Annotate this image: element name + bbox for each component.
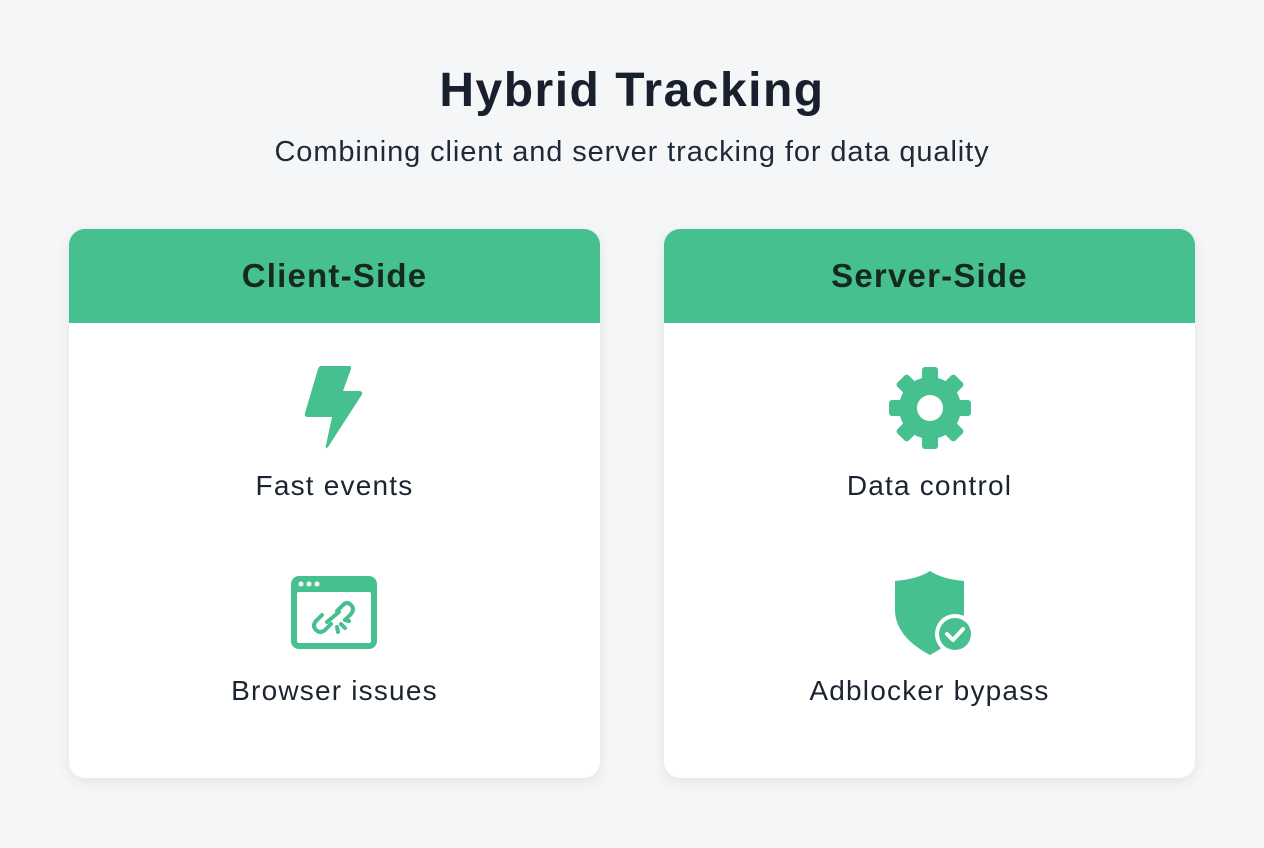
- icon: browser broken link: [291, 576, 377, 649]
- icon: lightning bolt: [304, 366, 362, 448]
- header: client-side: Client-Side: [242, 257, 427, 294]
- panel: client-side: [69, 229, 600, 778]
- icon: shield check: [895, 571, 971, 655]
- label: adblocker bypass: Adblocker bypass: [809, 675, 1050, 706]
- header: server-side: Server-Side: [831, 257, 1028, 294]
- subtitle: Combining client and server tracking for data quality: [274, 136, 990, 168]
- icon: gear: [889, 367, 971, 449]
- header: client-side: [69, 229, 600, 323]
- title: Hybrid Tracking: [439, 64, 825, 117]
- panel: server-side: [664, 229, 1195, 778]
- label: fast events: Fast events: [256, 470, 413, 501]
- label: browser issues: Browser issues: [231, 675, 438, 706]
- label: data control: Data control: [847, 470, 1012, 501]
- header: server-side: [664, 229, 1195, 323]
